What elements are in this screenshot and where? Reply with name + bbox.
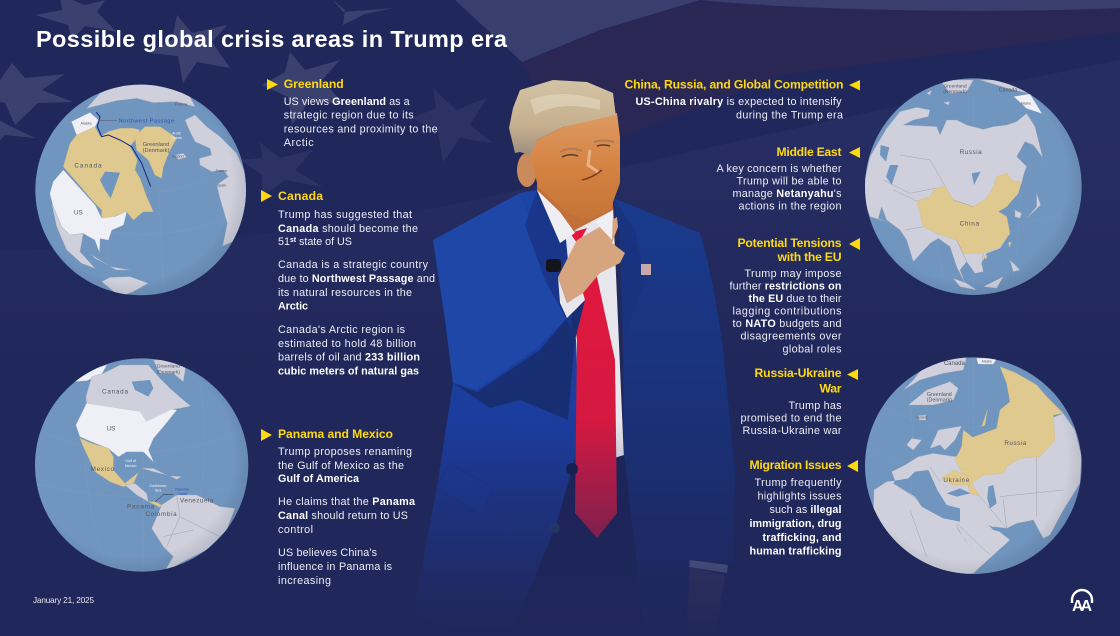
- section: Potential Tensions with the EU: further restrictions on: [730, 280, 842, 292]
- cuff: [558, 277, 585, 318]
- globe: Canada and Greenland: Spain: [217, 184, 226, 188]
- globe: US, Mexico and Panama: Gulf of: [125, 459, 137, 463]
- hair: [509, 80, 618, 155]
- globe: US, Mexico and Panama: Greenland: [157, 364, 180, 370]
- section: China, Russia, and Global Competition: US-China rivalry is expected to intensify: [636, 96, 842, 108]
- logo: AA: [1072, 590, 1092, 615]
- section: Potential Tensions with the EU: to NATO budgets and: [732, 318, 842, 330]
- globe: US, Mexico and Panama: Panama: [127, 503, 155, 510]
- section: Panama and Mexico: Canal should return to US: [278, 510, 408, 522]
- globe: US, Mexico and Panama: Mexico: [91, 466, 114, 473]
- section: Middle East: Trump will be able to: [736, 176, 842, 188]
- globe: Canada and Greenland: Greenland: [143, 142, 169, 148]
- section: Canada: Canada's Arctic region is: [278, 324, 406, 336]
- section: Canada: due to Northwest Passage and: [278, 273, 435, 285]
- section: Potential Tensions with the EU: Trump may impose: [744, 268, 842, 280]
- section: Migration Issues: human trafficking: [750, 546, 842, 558]
- globe: Russia and Ukraine: Alaska: [982, 360, 992, 364]
- section: Potential Tensions with the EU: disagreements over: [740, 330, 842, 342]
- figure: Trump pointing: [400, 80, 745, 636]
- section: China, Russia, and Global Competition: China, Russia, and Global Competition: [624, 78, 844, 92]
- microphone: [546, 259, 561, 272]
- globe: China and Russia: (Denmark): [943, 89, 967, 95]
- section: Greenland: US views Greenland as a: [284, 96, 410, 108]
- section: Middle East: actions in the region: [738, 200, 842, 212]
- globe: China and Russia: [863, 78, 1082, 295]
- section: Canada: estimated to hold 48 billion: [278, 338, 416, 350]
- globe: Canada and Greenland: Iceland: [172, 154, 184, 158]
- globe: US, Mexico and Panama: Venezuela: [180, 497, 214, 504]
- section: Panama and Mexico: increasing: [278, 575, 331, 587]
- section: Russia-Ukraine War: promised to end the: [740, 412, 842, 424]
- section: Panama and Mexico: the Gulf of Mexico as the: [278, 460, 404, 472]
- globe: Canada and Greenland: Russia: [175, 101, 188, 106]
- left hand cuff: [689, 560, 728, 573]
- section: Canada: barrels of oil and 233 billion: [278, 352, 420, 364]
- neck: [537, 180, 613, 243]
- section: Middle East: A key concern is whether: [716, 163, 842, 175]
- globe: China and Russia: Greenland: [943, 83, 967, 89]
- section: Greenland: Arctic: [284, 137, 314, 149]
- section: Canada: Arctic: [278, 300, 308, 312]
- globe: China and Russia: Canada: [999, 88, 1017, 94]
- section: Greenland: resources and proximity to the: [284, 124, 438, 136]
- section: Canada: Canada: [278, 189, 323, 203]
- section: Panama and Mexico: He claims that the Panama: [278, 496, 416, 508]
- section: Panama and Mexico: Trump proposes renaming: [278, 446, 412, 458]
- globe: US, Mexico and Panama: US: [107, 426, 115, 433]
- globe: Canada and Greenland: US: [74, 210, 83, 217]
- section: Middle East: [716, 145, 860, 212]
- globe: Canada and Greenland: (Denmark): [143, 148, 169, 154]
- title: Possible global crisis areas in Trump era: [36, 26, 508, 52]
- face: [530, 113, 620, 220]
- hair highlight: [530, 94, 600, 115]
- hand: [558, 217, 625, 303]
- trousers: [505, 455, 650, 636]
- section: Canada: Canada is a strategic country: [278, 259, 429, 271]
- globe: US, Mexico and Panama: [35, 358, 248, 573]
- section: Russia-Ukraine War: Russia-Ukraine: [754, 366, 842, 380]
- section: Migration Issues: Trump frequently: [754, 477, 842, 489]
- section: Potential Tensions with the EU: the EU due to their: [748, 293, 842, 305]
- section: Panama and Mexico: Panama and Mexico: [278, 427, 393, 441]
- collar: [537, 190, 613, 243]
- section: Russia-Ukraine War: [740, 366, 858, 437]
- section: China, Russia, and Global Competition: during the Trump era: [736, 110, 843, 122]
- globe: Canada and Greenland: [35, 83, 250, 297]
- section: Russia-Ukraine War: Russia-Ukraine war: [742, 425, 842, 437]
- section: Greenland: strategic region due to its: [284, 110, 414, 122]
- eyes, nose and mouth: [560, 140, 614, 180]
- pocket flap: [437, 463, 492, 515]
- section: Panama and Mexico: [261, 427, 416, 587]
- globe: China and Russia: China: [960, 220, 979, 227]
- globe: China and Russia: Alaska: [1021, 102, 1031, 106]
- section: Russia-Ukraine War: War: [820, 382, 842, 396]
- section: Migration Issues: [750, 458, 858, 558]
- globe: US, Mexico and Panama: Caribbean: [150, 484, 166, 488]
- globe: Canada and Greenland: Arctic: [172, 131, 181, 135]
- ear: [517, 153, 537, 187]
- globe: Russia and Ukraine: Canada: [944, 361, 965, 367]
- globe: Canada and Greenland: Alaska: [81, 122, 92, 126]
- section: Potential Tensions with the EU: [730, 236, 860, 356]
- globe: Canada and Greenland: France: [216, 169, 227, 173]
- section: Panama and Mexico: US believes China's: [278, 547, 378, 559]
- section: Migration Issues: such as illegal: [770, 504, 842, 516]
- section: Migration Issues: trafficking, and: [762, 532, 842, 544]
- globe: Russia and Ukraine: Russia: [1004, 440, 1027, 447]
- globe: US, Mexico and Panama: Canada: [102, 389, 128, 396]
- section: China, Russia, and Global Competition: [624, 78, 860, 122]
- globe: Russia and Ukraine: Iceland: [917, 415, 928, 419]
- section: Migration Issues: highlights issues: [758, 490, 842, 502]
- globe: Russia and Ukraine: Ukraine: [943, 477, 970, 484]
- section: Potential Tensions with the EU: with the EU: [776, 250, 842, 264]
- lapel: [525, 190, 572, 330]
- globe: US, Mexico and Panama: Colombia: [145, 511, 177, 518]
- section: Russia-Ukraine War: Trump has: [788, 400, 842, 412]
- section: Greenland: Greenland: [284, 77, 344, 91]
- section: Middle East: Middle East: [776, 145, 842, 159]
- globe: Russia and Ukraine: Greenland: [927, 392, 952, 398]
- jacket buttons: [566, 463, 578, 475]
- globe: Canada and Greenland: Northwest Passage: [119, 119, 174, 125]
- date: January 21, 2025: [33, 596, 94, 605]
- globe: US, Mexico and Panama: Mexico: [125, 464, 136, 468]
- section: Panama and Mexico: control: [278, 524, 313, 536]
- lower fade: [400, 420, 745, 636]
- section: Panama and Mexico: Gulf of America: [278, 473, 360, 485]
- globe: US, Mexico and Panama: (Denmark): [157, 369, 180, 375]
- globe: US, Mexico and Panama: Canal: [177, 492, 187, 496]
- section: Panama and Mexico: influence in Panama is: [278, 561, 393, 573]
- jacket left side: [413, 190, 580, 636]
- section: Migration Issues: Migration Issues: [750, 458, 842, 472]
- globe: Russia and Ukraine: (Denmark): [927, 398, 952, 404]
- shirt: [537, 190, 624, 500]
- section: Migration Issues: immigration, drug: [750, 518, 842, 530]
- section: Potential Tensions with the EU: global roles: [782, 344, 842, 356]
- section: Greenland: [267, 77, 438, 149]
- jacket right side: [613, 198, 735, 636]
- section: Canada: Canada should become the: [278, 223, 418, 235]
- left hand: [686, 567, 725, 636]
- section: Canada: its natural resources in the: [278, 287, 412, 299]
- section: Canada: cubic meters of natural gas: [278, 366, 419, 378]
- section: Potential Tensions with the EU: lagging contributions: [732, 306, 842, 318]
- section: Middle East: manage Netanyahu's: [732, 188, 842, 200]
- flag pin: [641, 264, 651, 275]
- globe: US, Mexico and Panama: Panama: [175, 487, 190, 491]
- arm shadow: [453, 300, 585, 420]
- route: Northwest Passage: [96, 112, 151, 187]
- globe: China and Russia: Russia: [960, 149, 982, 156]
- section: Canada: 51st state of US: [278, 236, 352, 248]
- globe: Canada and Greenland: Ocean: [171, 136, 182, 140]
- tie: [570, 228, 617, 538]
- section: Canada: [261, 189, 435, 378]
- arm sleeve: [433, 193, 567, 390]
- globe: Russia and Ukraine: [865, 357, 1082, 577]
- section: Potential Tensions with the EU: Potential Tensions: [738, 236, 842, 250]
- globe: Canada and Greenland: Canada: [74, 162, 102, 169]
- logo: AA: AA: [1072, 598, 1092, 615]
- section: Canada: Trump has suggested that: [278, 209, 412, 221]
- globe: US, Mexico and Panama: Sea: [155, 489, 162, 493]
